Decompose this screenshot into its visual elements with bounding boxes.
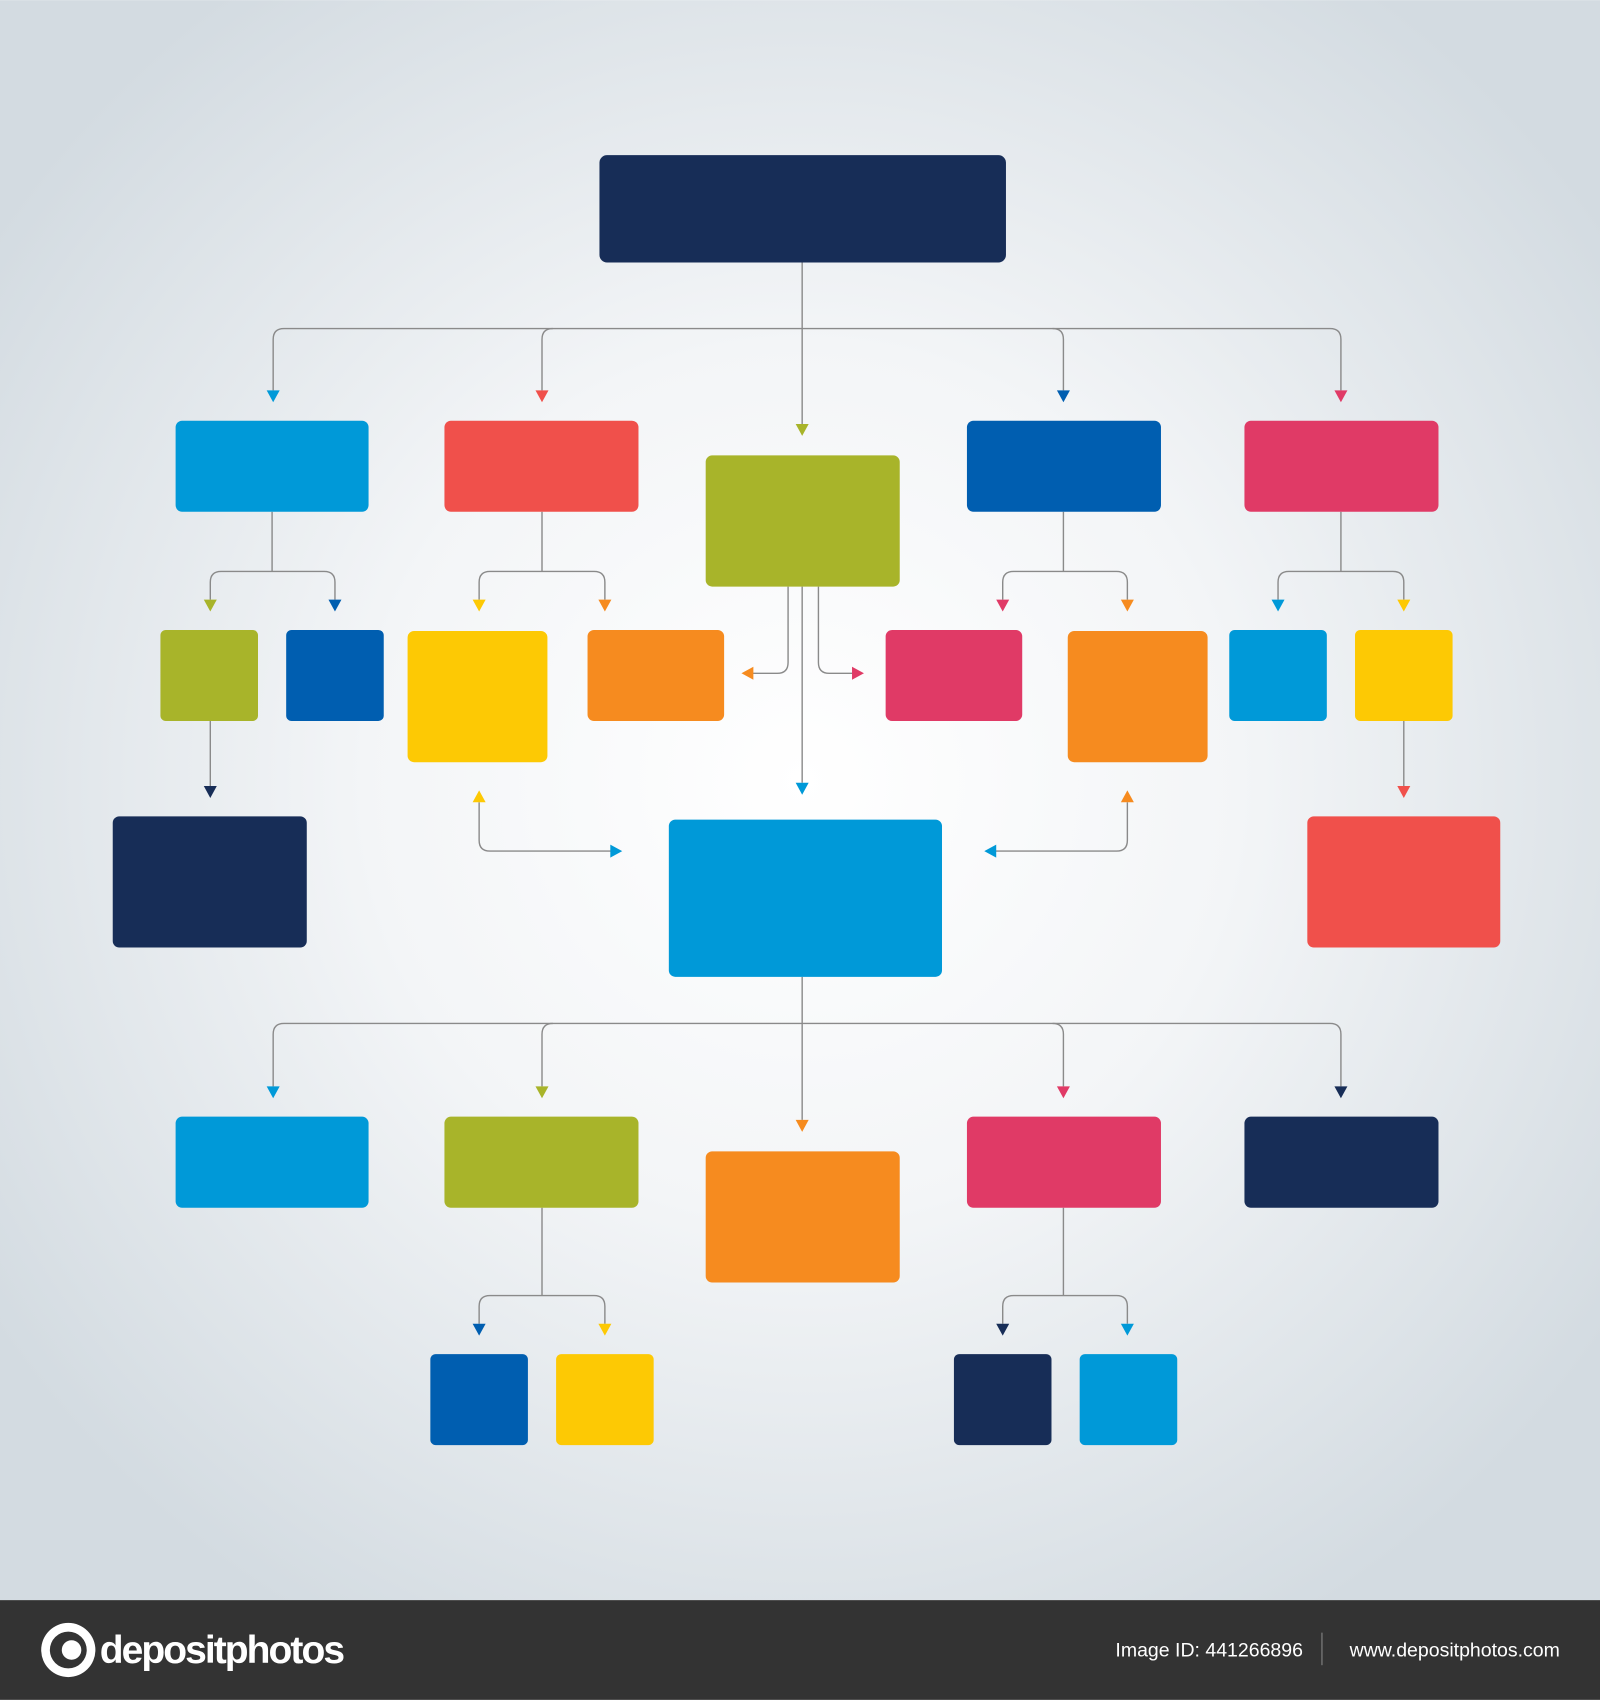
footer bar	[0, 1600, 1600, 1700]
row 1 boxes	[176, 421, 1438, 587]
icon: logo	[41, 1623, 95, 1677]
url: www.depositphotos.com	[1349, 1640, 1560, 1662]
row 3 boxes	[113, 816, 1500, 977]
row 4 boxes	[176, 1117, 1438, 1283]
arrowheads	[204, 390, 1410, 1336]
brand text: depositphotos	[100, 1629, 344, 1672]
connectors	[210, 262, 1404, 1324]
row 2 boxes	[160, 630, 1453, 762]
box: top root	[599, 155, 1006, 262]
row 5 boxes	[430, 1354, 1177, 1445]
image id: Image ID: 441266896	[1115, 1640, 1303, 1662]
